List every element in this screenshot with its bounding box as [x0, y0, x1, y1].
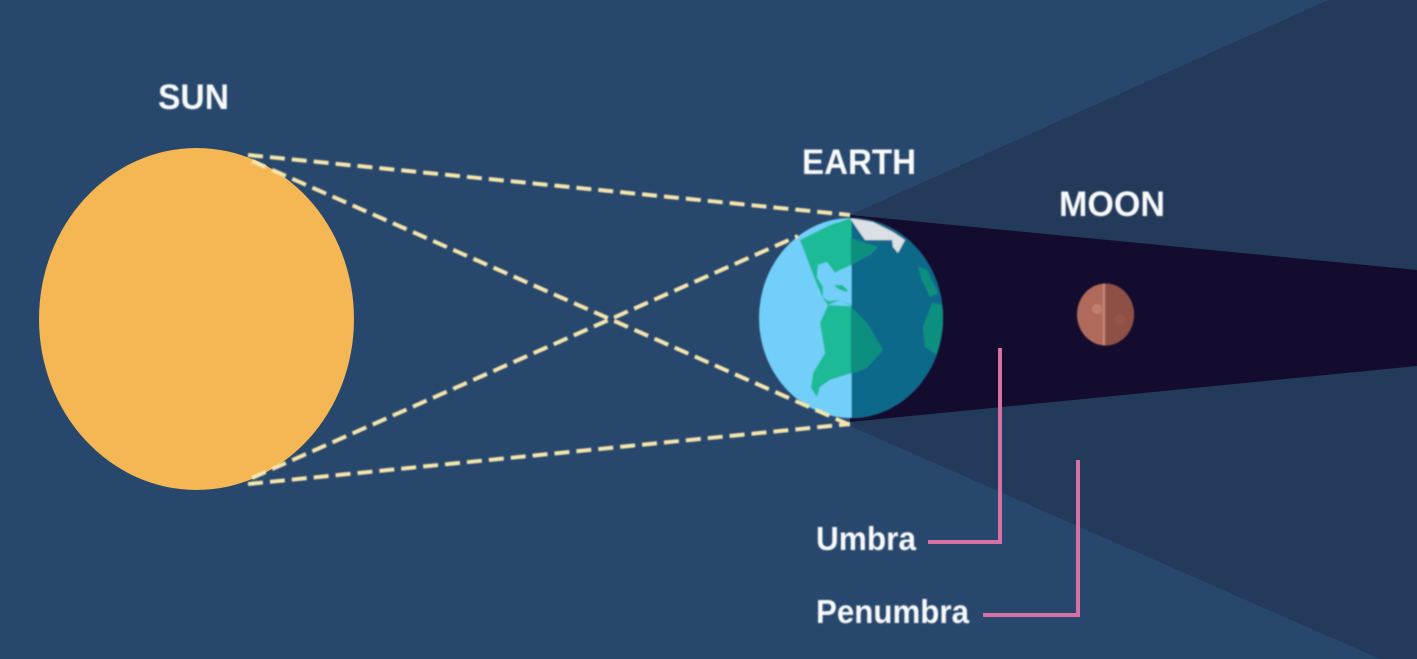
label: umbra: Umbra — [816, 520, 917, 557]
penumbra shadow — [850, 0, 1417, 659]
south america, night side — [851, 307, 883, 374]
label: penumbra: Penumbra — [816, 593, 970, 630]
dashed light rays — [248, 155, 850, 484]
icon: eclipsed moon — [1076, 282, 1135, 346]
north america, night side — [851, 238, 878, 265]
polar ice cap — [850, 218, 905, 253]
label: earth: EARTH — [802, 143, 916, 182]
icon: sun — [39, 148, 354, 490]
icon: earth — [759, 210, 952, 426]
north america, day side — [800, 218, 852, 397]
penumbra pointer line — [983, 460, 1078, 615]
europe — [918, 267, 938, 297]
label: sun: SUN — [158, 78, 229, 117]
umbra pointer line — [928, 348, 1000, 542]
earth night side — [850, 217, 944, 419]
label: moon: MOON — [1059, 185, 1165, 224]
africa — [923, 303, 945, 355]
caribbean islands — [834, 285, 848, 292]
umbra shadow — [850, 215, 1417, 422]
